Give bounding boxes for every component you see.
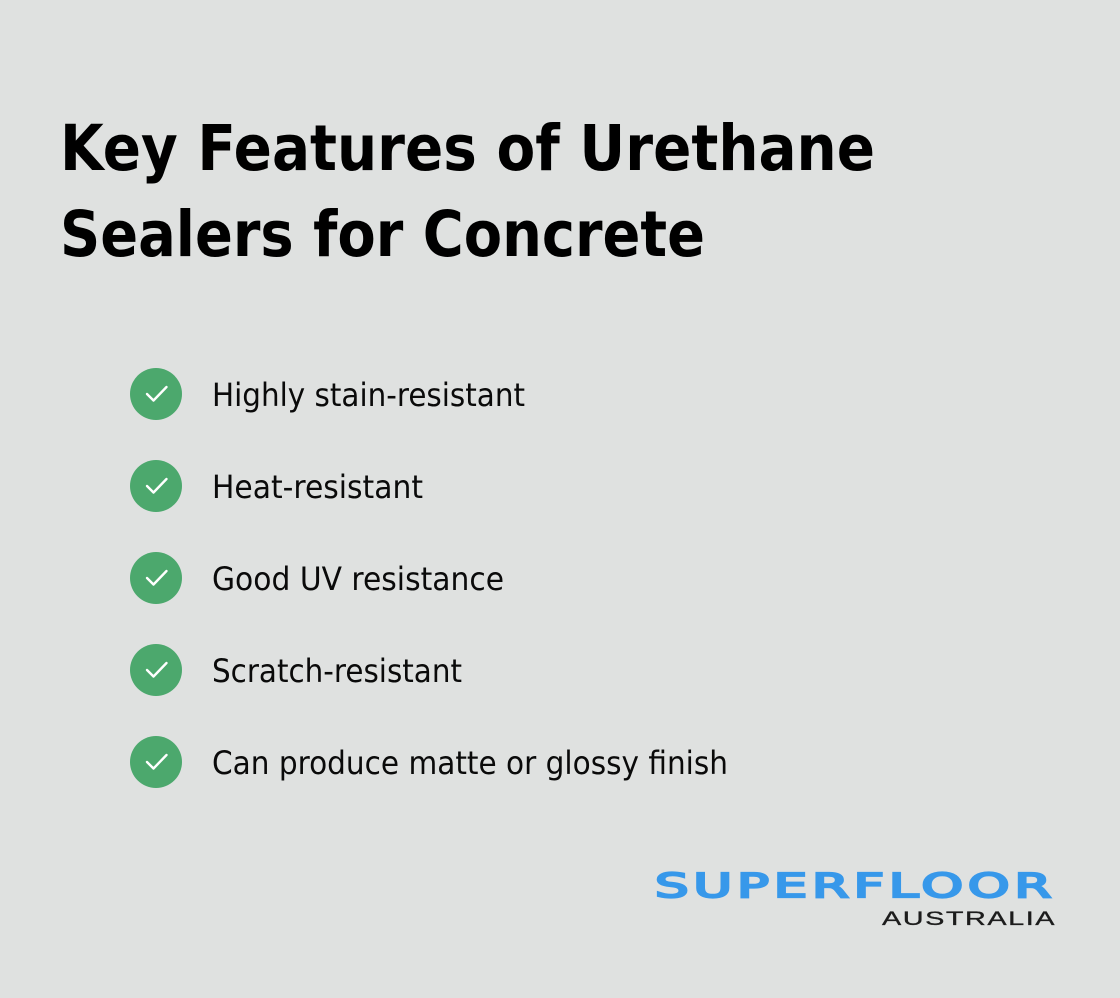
item: heat-resistant (130, 460, 423, 512)
item: heat-resistant: Heat-resistant (212, 468, 423, 506)
feature list (130, 368, 728, 788)
logo: Superfloor Australia: SUPERFLOOR (655, 866, 1056, 905)
item: scratch-resistant: Scratch-resistant (212, 652, 462, 690)
title: Key Features of Urethane (60, 112, 875, 185)
title (60, 112, 875, 271)
item: matte or glossy finish (130, 736, 728, 788)
title: Sealers for Concrete (60, 198, 705, 271)
item: good UV resistance: Good UV resistance (212, 560, 504, 598)
item: highly stain-resistant: Highly stain-resistant (212, 376, 525, 414)
item: highly stain-resistant (130, 368, 525, 420)
logo: Superfloor Australia (655, 866, 1056, 930)
item: matte or glossy finish: Can produce matte or glossy finish (212, 744, 728, 782)
logo: Superfloor Australia: AUSTRALIA (882, 909, 1056, 930)
item: scratch-resistant (130, 644, 462, 696)
item: good UV resistance (130, 552, 504, 604)
